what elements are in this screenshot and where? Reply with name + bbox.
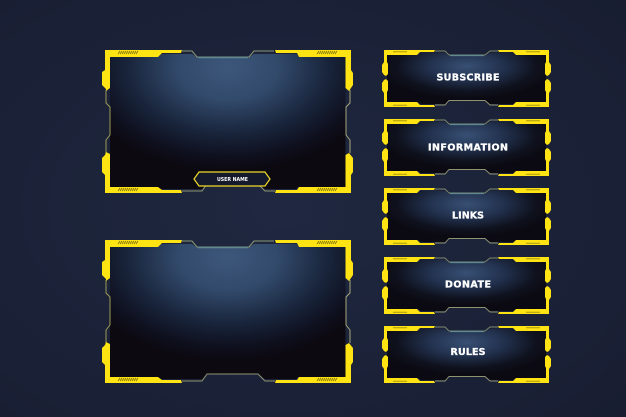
user name badge: USER NAME [217,177,249,183]
panel: links button: LINKS [452,210,484,222]
panel: links button [382,188,551,245]
panel: subscribe button: SUBSCRIBE [436,72,500,84]
panel: information button [382,119,551,176]
panel: rules button [382,326,551,383]
panel: donate button: DONATE [445,280,491,290]
panel: subscribe button [382,50,551,107]
panel: large blank screen [102,240,353,383]
panel: large screen with user name [102,50,353,193]
panel: donate button [382,257,551,314]
panel: rules button: RULES [450,347,486,358]
user name badge [194,172,270,186]
panel: information button: INFORMATION [428,142,508,154]
